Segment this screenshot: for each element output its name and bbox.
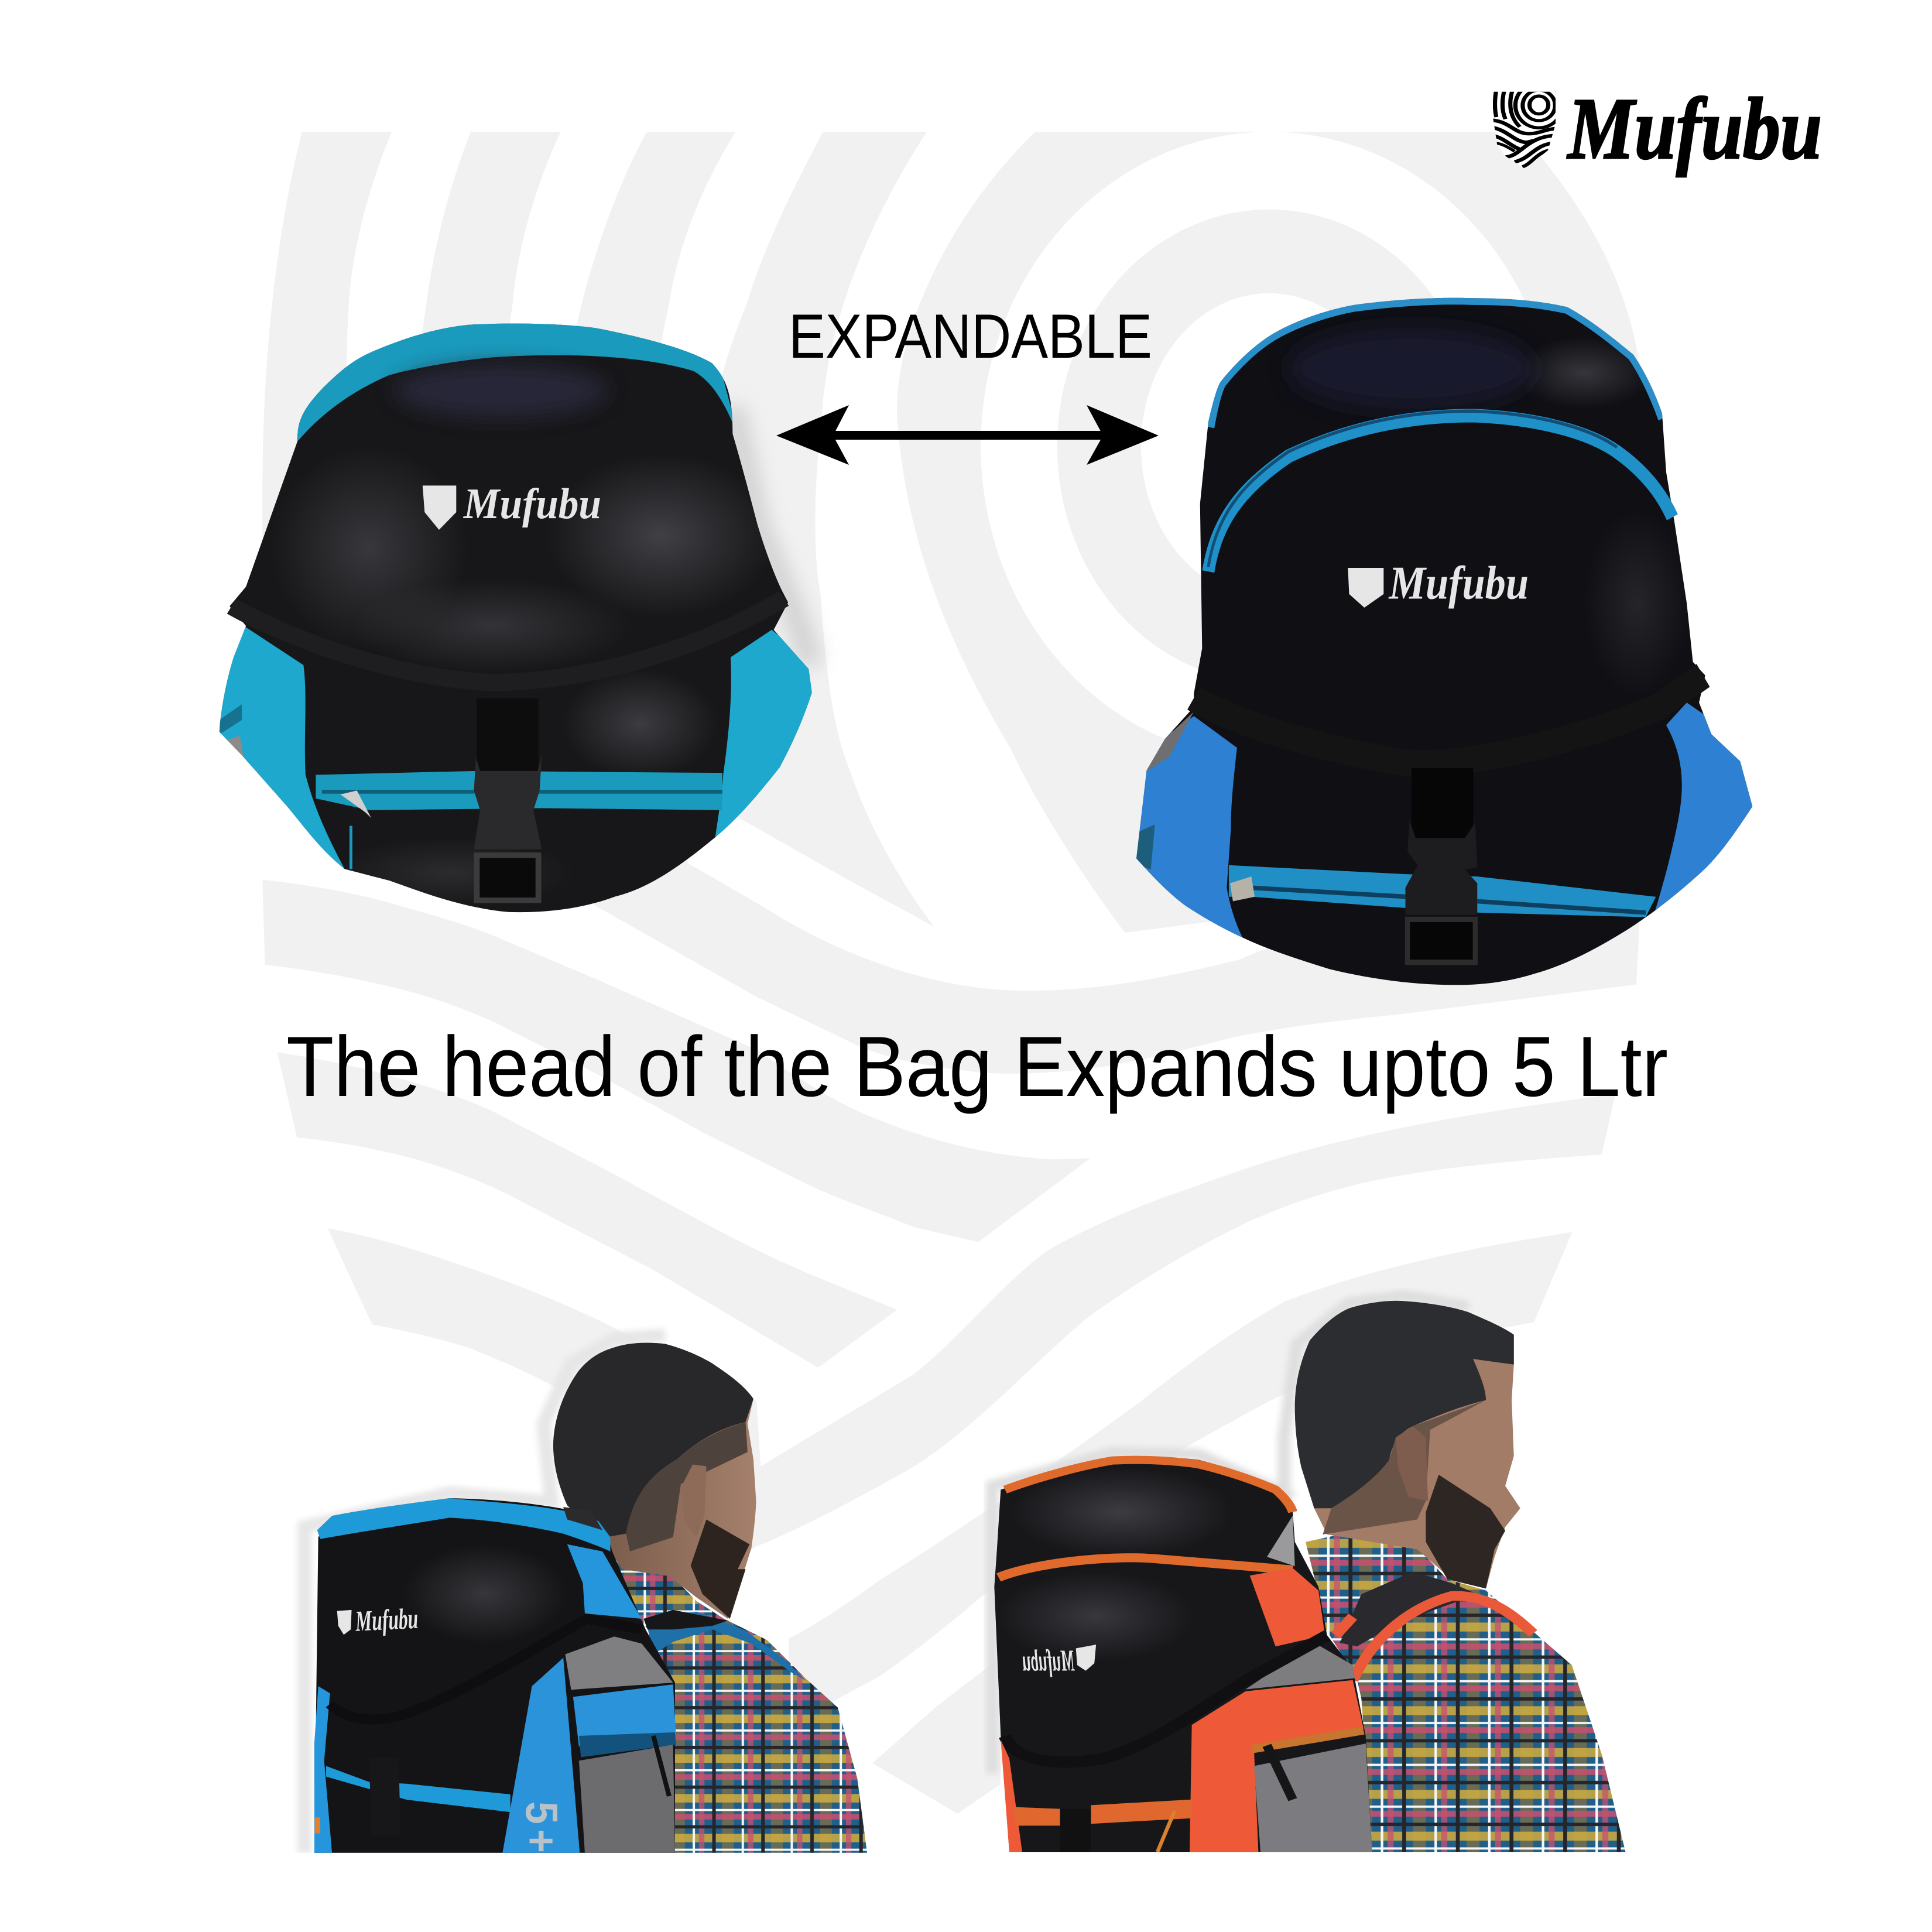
photo: man with expanded orange backpack <box>992 1296 1625 1852</box>
ear <box>681 1464 707 1537</box>
watermark vertical band 3 with lower wave <box>557 132 1646 1074</box>
left orange edge <box>1001 1740 1022 1852</box>
mirrored shield <box>1076 1645 1096 1671</box>
watermark vertical band 1 <box>262 132 392 539</box>
orange edge detail <box>315 1817 320 1834</box>
fabric highlight middle <box>353 579 632 673</box>
plastic buckle <box>474 755 542 900</box>
zipper band <box>1229 865 1656 917</box>
backpack body <box>314 1498 675 1853</box>
shoulder strap <box>1340 1572 1477 1646</box>
bag logo shield <box>337 1610 352 1635</box>
plastic buckle <box>1406 820 1477 962</box>
logo: Mufubu wordmark <box>1490 80 1822 177</box>
pocket zipper <box>1252 1731 1364 1749</box>
front buckle <box>369 1757 400 1835</box>
lower zipper band <box>1013 1800 1192 1825</box>
cut-out halo <box>304 1335 665 1853</box>
bag logo <box>337 1602 419 1638</box>
left blue edge <box>314 1686 332 1853</box>
right highlight <box>1584 508 1691 698</box>
watermark vertical band 4 <box>722 132 933 926</box>
watermark rising band 1 <box>751 1096 1615 1550</box>
soft shadow <box>732 406 812 665</box>
flap hem <box>1194 676 1703 763</box>
hair fade <box>1323 1400 1486 1534</box>
head silhouette skin <box>553 1343 756 1619</box>
shoulder strap <box>646 1612 806 1681</box>
watermark rising band 2 <box>789 1232 1572 1725</box>
gray lower pocket <box>1254 1743 1372 1852</box>
embroidered logo <box>423 480 601 530</box>
strap top black <box>643 1610 728 1629</box>
fabric highlight right <box>546 453 776 618</box>
fabric highlight <box>1514 337 1654 409</box>
body highlight lower <box>328 838 574 908</box>
top zipper <box>1208 298 1664 427</box>
zipper band <box>316 771 722 810</box>
printed capacity mark: 5+ <box>516 1801 567 1853</box>
embroidered wordmark: Mufubu <box>463 480 601 528</box>
left blue side panel <box>1124 716 1247 947</box>
front buckle <box>1060 1809 1091 1852</box>
pocket zipper <box>579 1732 676 1757</box>
right blue side panel <box>1654 703 1765 915</box>
watermark wave 1 <box>262 880 1091 1242</box>
fabric highlight left <box>270 446 468 649</box>
fabric highlight <box>1009 1467 1232 1557</box>
beard <box>691 1519 749 1619</box>
hair fade <box>626 1422 748 1551</box>
fabric highlight lower <box>996 1572 1194 1662</box>
dark stripes <box>1135 824 1155 869</box>
photo: man with closed blue backpack <box>304 1335 867 1853</box>
zipper pull <box>1230 876 1255 902</box>
embroidered shield <box>1348 568 1383 608</box>
gray side patch <box>1145 711 1194 773</box>
gray inner opening <box>1267 1516 1295 1566</box>
watermark inner ring <box>1057 210 1434 669</box>
blue vertical strap <box>502 1658 580 1853</box>
orange pocket panel <box>1190 1680 1364 1852</box>
cut-out halo <box>992 1296 1469 1773</box>
backpack fabric highlight <box>403 1544 567 1643</box>
bag contents clipped to outline <box>1124 287 1768 995</box>
heading: main caption: The head of the Bag Expands upto 5 Ltr <box>286 1019 1668 1114</box>
gray side patch <box>217 736 246 771</box>
teal pull cord <box>350 826 352 869</box>
watermark wave 2 <box>278 1052 897 1368</box>
hair <box>1295 1301 1514 1508</box>
top zipper <box>1005 1460 1293 1512</box>
navy panel <box>1289 327 1535 409</box>
ear <box>1396 1426 1428 1501</box>
hair <box>553 1343 753 1537</box>
side stripes <box>220 704 242 734</box>
backpack body <box>994 1457 1372 1852</box>
flap hem <box>232 598 784 683</box>
logo shield icon <box>1490 83 1563 172</box>
top zipper band <box>317 1498 610 1551</box>
right teal side panel <box>714 630 821 845</box>
watermark outer ring <box>897 132 1646 933</box>
watermark ring centre <box>1141 293 1328 575</box>
photo: expanded bag head (blue) <box>1124 287 1768 995</box>
plaid shirt <box>614 1562 867 1853</box>
gray upper pocket <box>1245 1643 1355 1690</box>
zipper pull <box>1267 1745 1293 1800</box>
blue shoulder panel <box>567 1544 642 1619</box>
plaid shirt <box>1306 1531 1625 1852</box>
dark top corner <box>563 1507 602 1530</box>
photo: man with expanded orange backpack: Mufubu <box>1022 1644 1075 1678</box>
second zipper arc <box>1208 411 1673 571</box>
blue pocket <box>573 1684 676 1746</box>
bag body <box>1124 287 1768 995</box>
orange side panel <box>1250 1568 1325 1646</box>
body highlight <box>562 669 718 779</box>
photo: collapsed bag head (teal) <box>205 304 849 919</box>
bag body <box>205 304 849 919</box>
embroidered wordmark: Mufubu <box>1388 556 1529 609</box>
bag logo wordmark: Mufubu <box>354 1602 419 1638</box>
watermark ring gap <box>981 132 1557 761</box>
embroidered shield <box>423 485 456 530</box>
mirrored bag logo <box>1022 1644 1096 1678</box>
webbing strap <box>1412 768 1473 840</box>
upper navy panel <box>394 363 607 418</box>
top zipper band <box>293 320 739 446</box>
embroidered logo <box>1348 556 1529 609</box>
zipper pull <box>340 790 371 818</box>
left teal side panel <box>205 626 347 873</box>
watermark wave 3 <box>328 1228 761 1471</box>
head silhouette skin <box>1295 1301 1520 1588</box>
front zipper band <box>326 1766 511 1812</box>
arrow: double-headed expand arrow <box>776 405 1159 465</box>
watermark vertical band 2 <box>422 132 561 334</box>
orange strap trim <box>1335 1596 1533 1680</box>
flap hem <box>330 1619 642 1719</box>
logo wordmark text: Mufubu <box>1567 80 1822 177</box>
watermark: large shield logo <box>262 132 1646 1814</box>
gray lower pocket <box>579 1745 675 1853</box>
webbing strap <box>477 698 539 773</box>
flap hem <box>1005 1635 1327 1762</box>
beard <box>1426 1475 1505 1588</box>
watermark bottom tip <box>872 1657 1001 1814</box>
pull cord <box>1157 1811 1174 1852</box>
pocket zip pull <box>653 1736 669 1796</box>
gray upper pocket <box>565 1636 673 1690</box>
bag contents clipped to outline <box>205 304 849 919</box>
heading: EXPANDABLE: EXPANDABLE <box>789 301 1152 371</box>
second zipper <box>999 1558 1293 1577</box>
